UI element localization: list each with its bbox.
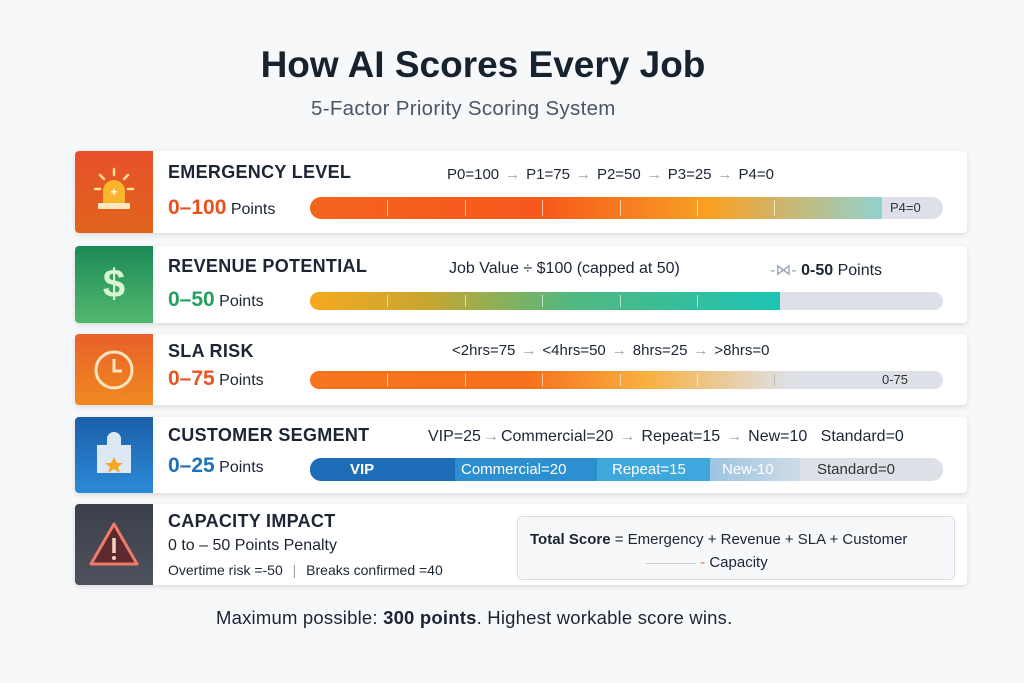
points: 0–50 Points (168, 288, 264, 311)
bar chart (310, 371, 943, 389)
callout: total score formula: Total Score = Emergency + Revenue + SLA + Customer (530, 531, 907, 548)
segmented bar: Standard=0 (817, 461, 895, 478)
heading: CUSTOMER SEGMENT (168, 425, 369, 445)
icon: warning (75, 504, 153, 585)
panel: revenue potential (75, 246, 967, 323)
heading: EMERGENCY LEVEL (168, 162, 351, 182)
footer note: Maximum possible: 300 points. Highest workable score wins. (216, 607, 732, 628)
icon: dollar (75, 246, 153, 323)
subtitle: 5-Factor Priority Scoring System (311, 97, 616, 120)
icon: siren (75, 151, 153, 233)
bar chart (310, 197, 943, 219)
segmented bar: New-10 (722, 461, 774, 478)
details: Overtime risk =-50 | Breaks confirmed =40 (168, 562, 443, 578)
penalty: 0 to – 50 Points Penalty (168, 537, 337, 554)
sequence: <2hrs=75 → <4hrs=50 → 8hrs=25 → >8hrs=0 (452, 342, 769, 359)
panel: customer segment (75, 417, 967, 493)
sequence: VIP=25→Commercial=20 → Repeat=15 → New=10 Standard=0 (428, 428, 904, 445)
formula: Job Value ÷ $100 (capped at 50) (449, 260, 680, 277)
segmented bar: Repeat=15 (612, 461, 686, 478)
sequence: P0=100 → P1=75 → P2=50 → P3=25 → P4=0 (447, 166, 774, 183)
callout: total score formula: - Capacity (700, 554, 768, 571)
panel: emergency level (75, 151, 967, 233)
bar chart: P4=0 (890, 200, 921, 215)
icon: dollar: $ (103, 262, 125, 306)
heading: SLA RISK (168, 341, 254, 361)
title: How AI Scores Every Job (261, 44, 705, 85)
bar chart (310, 292, 943, 310)
panel: capacity impact (75, 504, 967, 585)
callout: total score formula (517, 516, 955, 580)
segmented bar (310, 458, 943, 481)
panel: SLA risk (75, 334, 967, 405)
points: 0–100 Points (168, 196, 275, 219)
max points: -⋈- 0-50 Points (770, 262, 882, 279)
icon: badge star (75, 417, 153, 493)
segmented bar: VIP (350, 461, 374, 478)
icon: siren: + (110, 185, 118, 199)
points: 0–25 Points (168, 454, 264, 477)
bar chart: 0-75 (882, 372, 908, 387)
points: 0–75 Points (168, 367, 264, 390)
heading: CAPACITY IMPACT (168, 511, 336, 531)
icon: clock (75, 334, 153, 405)
segmented bar: Commercial=20 (461, 461, 566, 478)
heading: REVENUE POTENTIAL (168, 256, 367, 276)
